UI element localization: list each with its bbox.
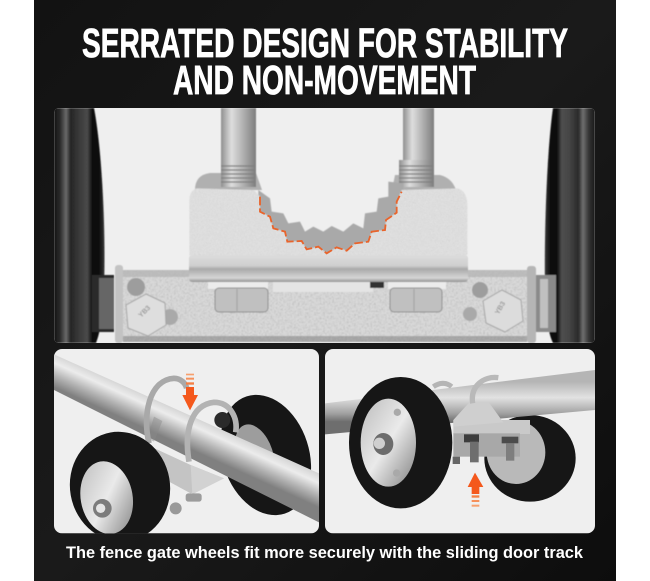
panel: left photo (54, 349, 319, 534)
clamp hardware (453, 402, 530, 464)
U-bolt left (221, 108, 256, 187)
nuts under clamp (208, 282, 446, 312)
left bolt (126, 278, 178, 336)
lower channel (123, 270, 527, 342)
panel: serrated clamp close-up (54, 108, 595, 343)
icon: back wheel (214, 394, 312, 516)
icon: left wheel (54, 108, 105, 343)
U-bolt front (187, 402, 236, 462)
pipe (325, 370, 595, 434)
clamp front rail (189, 255, 468, 282)
back clamp shoulders (195, 173, 456, 190)
caption: The fence gate wheels fit more securely with the sliding door track (66, 544, 584, 562)
arrow up (468, 473, 483, 507)
rear U-bolt arc (433, 383, 452, 387)
left bolt: YB3 (138, 305, 152, 319)
right bolt: YB3 (494, 301, 507, 316)
bracket (155, 448, 224, 514)
right bolt (463, 282, 523, 332)
icon: front wheel (70, 432, 170, 534)
serration dashed line (260, 192, 402, 253)
pipe (54, 354, 319, 522)
icon: rear wheel (484, 415, 576, 502)
arrow down (182, 374, 198, 410)
right axle (527, 266, 556, 343)
U-bolt rear (147, 378, 187, 443)
front U-bolt arc (472, 377, 498, 403)
icon: right wheel (545, 108, 595, 343)
icon: front wheel (349, 377, 452, 508)
U-bolt right (399, 108, 434, 187)
back jaw teeth (258, 182, 403, 253)
left axle (92, 265, 123, 343)
title (82, 20, 568, 103)
pipe shadow band (151, 416, 162, 442)
panel: right photo (325, 349, 595, 533)
title: AND NON-MOVEMENT (173, 57, 476, 103)
clamp block (189, 188, 467, 255)
